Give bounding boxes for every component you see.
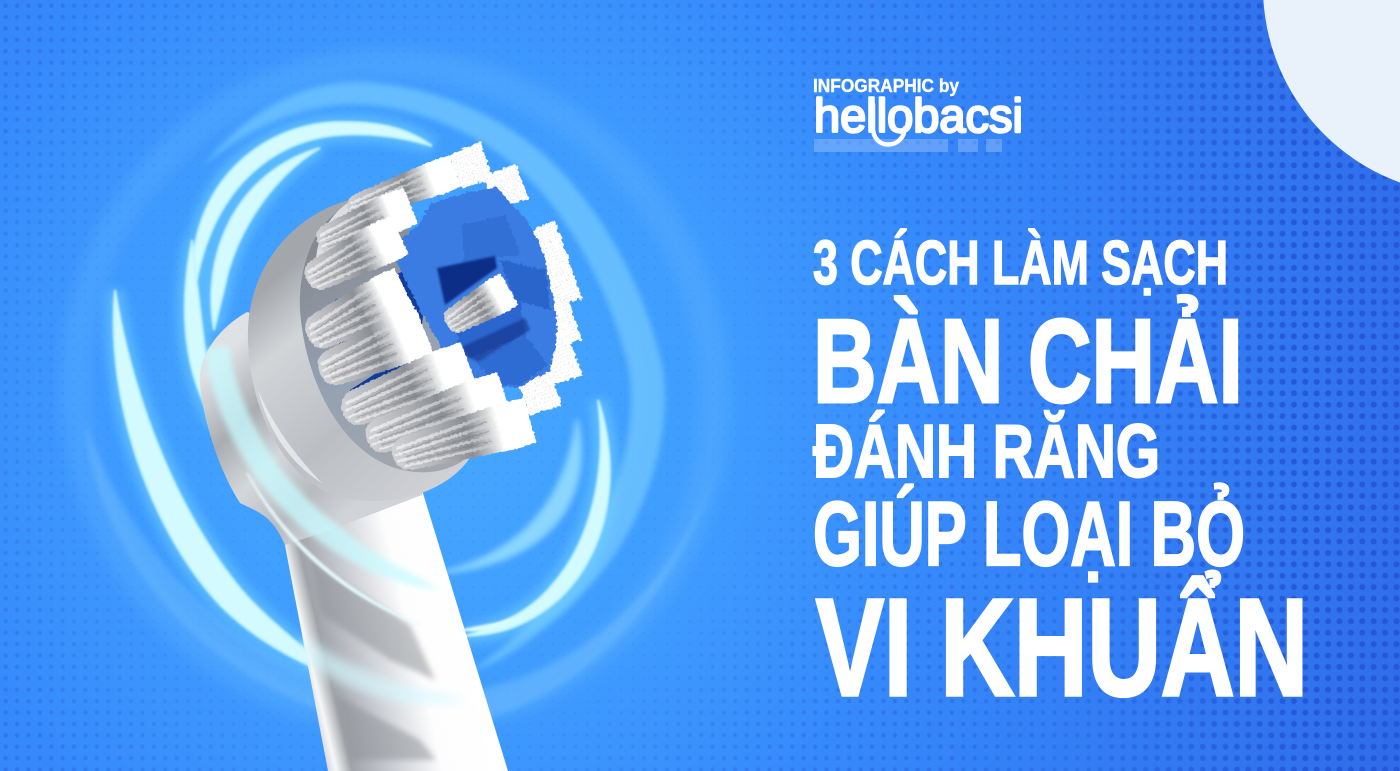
left white tufts [297, 154, 536, 480]
ring glow [114, 122, 610, 675]
lower inner crescent [445, 420, 580, 572]
rear top lip [316, 198, 372, 262]
band over handle [290, 640, 470, 704]
head inner face [300, 204, 480, 472]
outer faint swirl [63, 51, 726, 721]
swirl rings behind the brush [63, 51, 726, 721]
blue bristles [397, 187, 557, 387]
right white bristle tips [448, 142, 582, 417]
head highlight [258, 390, 322, 483]
logo caption: INFOGRAPHIC by [813, 76, 959, 96]
lower faint swirl [86, 434, 696, 718]
thin line over handle [247, 473, 420, 625]
handle grey chevrons [310, 560, 436, 760]
dark blue depth [335, 260, 430, 420]
brush handle [283, 480, 508, 771]
blue dark shadows [437, 256, 530, 362]
wide pale band [203, 82, 665, 672]
headline line 2: BÀN CHẢI [813, 295, 1243, 428]
headline line 3: ĐÁNH RĂNG [813, 409, 1160, 493]
ring core [114, 122, 610, 675]
headline line 1: 3 CÁCH LÀM SẠCH [813, 229, 1228, 298]
logo [813, 76, 1023, 152]
toothbrush [200, 142, 582, 771]
thin line right of handle [463, 618, 514, 630]
decorative corner circle [1263, 0, 1400, 195]
logo wordmark: hellobacsi [814, 89, 1023, 142]
logo stethoscope [873, 104, 905, 144]
flared collar [200, 312, 422, 545]
logo underline bars [814, 139, 1002, 152]
head cup [248, 198, 473, 501]
swirl rings in front of the brush [205, 345, 514, 704]
headline [813, 229, 1308, 725]
band over collar [205, 345, 440, 590]
